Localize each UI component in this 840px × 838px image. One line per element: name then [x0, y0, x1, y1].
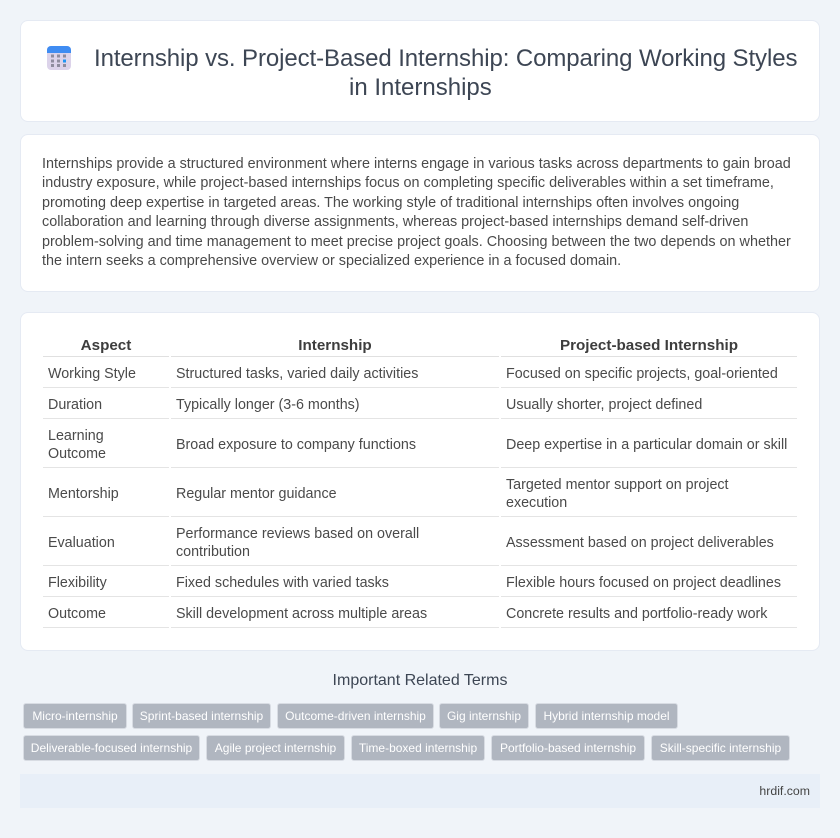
- text: Gig internship: [447, 709, 521, 723]
- comparison table: Deep expertise in a particular domain or skill: [506, 437, 787, 453]
- summary text: the intern seeks a comprehensive overview or specialized experience in a focused domain.: [42, 253, 621, 269]
- text: Micro-internship: [32, 709, 118, 723]
- text: Deliverable-focused internship: [31, 741, 192, 755]
- comparison table: Regular mentor guidance: [176, 486, 337, 502]
- comparison table: Internship: [298, 336, 372, 354]
- icon: calendar: [47, 46, 71, 70]
- comparison table: Mentorship: [48, 486, 119, 502]
- panel: table card: [20, 312, 820, 651]
- comparison table: Fixed schedules with varied tasks: [176, 575, 389, 591]
- footer: [20, 774, 820, 808]
- comparison table: Working Style: [48, 366, 136, 382]
- comparison table: Outcome: [48, 606, 106, 622]
- comparison table: Typically longer (3-6 months): [176, 397, 360, 413]
- heading: related terms: Important Related Terms: [333, 672, 507, 689]
- text: Time-boxed internship: [359, 741, 477, 755]
- title: in Internships: [349, 74, 492, 101]
- comparison table: [43, 336, 797, 628]
- summary text: promoting deep expertise in targeted areas. The working style of traditional internships often involves ongoing: [42, 195, 739, 211]
- text: Sprint-based internship: [140, 709, 263, 723]
- summary text: collaboration and learning through diverse assignments, whereas project-based internships demand self-driven: [42, 214, 748, 230]
- comparison table: Broad exposure to company functions: [176, 437, 416, 453]
- footer: hrdif.com: [759, 784, 810, 798]
- summary text: [42, 156, 791, 269]
- comparison table: Performance reviews based on overall: [176, 526, 419, 542]
- comparison table: Concrete results and portfolio-ready work: [506, 606, 767, 622]
- comparison table: Usually shorter, project defined: [506, 397, 702, 413]
- comparison table: Outcome: [48, 446, 106, 462]
- comparison table: Flexible hours focused on project deadlines: [506, 575, 781, 591]
- summary text: industry exposure, while project-based internships focus on completing specific deliverables within a set timeframe,: [42, 175, 774, 191]
- comparison table: Assessment based on project deliverables: [506, 535, 774, 551]
- comparison table: Targeted mentor support on project: [506, 477, 729, 493]
- comparison table: Skill development across multiple areas: [176, 606, 427, 622]
- text: Portfolio-based internship: [500, 741, 636, 755]
- comparison table: Project-based Internship: [560, 336, 738, 354]
- title: Internship vs. Project-Based Internship: Comparing Working Styles: [94, 45, 797, 72]
- text: Skill-specific internship: [660, 741, 781, 755]
- comparison table: contribution: [176, 544, 250, 560]
- panel: summary card: [20, 134, 820, 292]
- text: Outcome-driven internship: [285, 709, 426, 723]
- comparison table: Structured tasks, varied daily activities: [176, 366, 418, 382]
- comparison table: Evaluation: [48, 535, 115, 551]
- comparison table: Aspect: [81, 336, 131, 354]
- text: Hybrid internship model: [543, 709, 670, 723]
- title: [94, 45, 797, 101]
- comparison table: Flexibility: [48, 575, 107, 591]
- text: Agile project internship: [215, 741, 336, 755]
- comparison table: execution: [506, 495, 567, 511]
- comparison table: Focused on specific projects, goal-oriented: [506, 366, 778, 382]
- comparison table: Duration: [48, 397, 102, 413]
- tags: related terms: [23, 703, 790, 761]
- panel: title card: [20, 20, 820, 122]
- comparison table: Learning: [48, 428, 104, 444]
- summary text: Internships provide a structured environment where interns engage in various tasks across departments to gain broad: [42, 156, 791, 172]
- summary text: problem-solving and time management to meet precise project goals. Choosing between the two depends on whether: [42, 234, 791, 250]
